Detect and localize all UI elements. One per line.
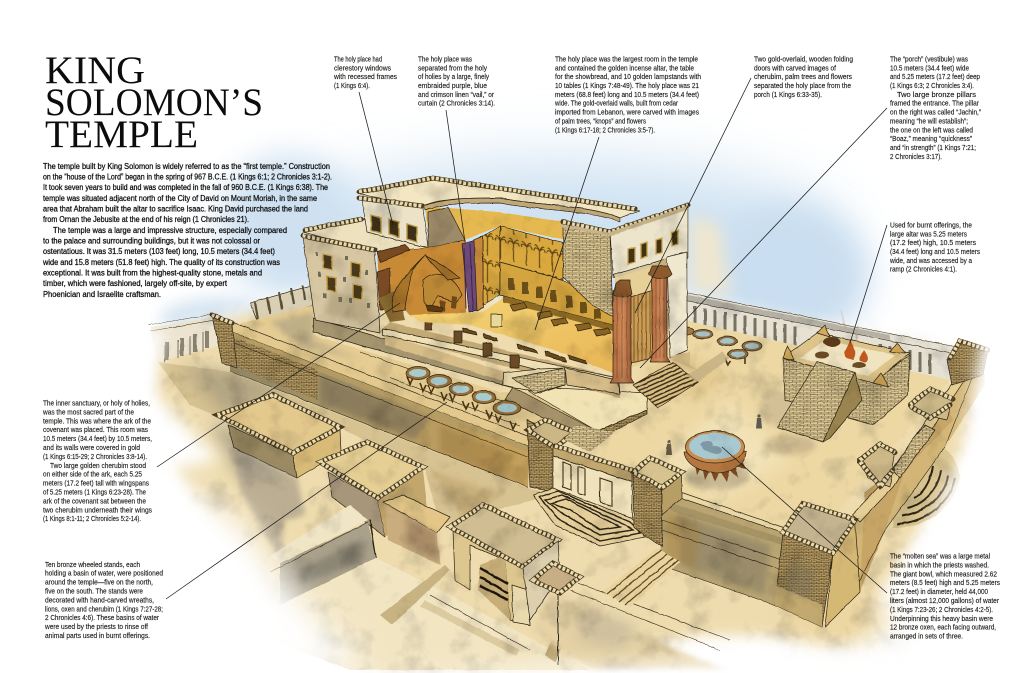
callout: porch and pillars: on the right was called “Jachin,” [890, 109, 982, 117]
callout: holy place: for the showbread, and 10 golden lampstands with [555, 73, 701, 81]
callout: altar [889, 222, 980, 274]
callout: bronze stands: holding a basin of water, were positioned [45, 570, 163, 578]
intro text: temple was situated adjacent north of the City of David on Mount Moriah, in the same [43, 194, 317, 203]
callout: folding doors: separated the holy place from the [754, 82, 851, 90]
callout: inner sanctuary: of 5.25 meters (1 Kings 6:23-28). The [43, 488, 146, 496]
altar top [783, 333, 910, 383]
clerestory wall [362, 200, 428, 248]
callout: molten sea [890, 552, 1000, 641]
callout: molten sea: 12 bronze oxen, each facing outward, [890, 624, 996, 632]
callout: vail curtain: separated from the holy [418, 64, 487, 72]
lower carved band [500, 262, 613, 325]
bronze wheeled basin stands [406, 366, 521, 429]
callout: porch and pillars: Two large bronze pillars [897, 91, 976, 99]
callout: folding doors [754, 56, 853, 99]
callout: inner sanctuary: (1 Kings 8:1-11; 2 Chronicles 5:2-14). [43, 515, 141, 523]
gate upper wall [553, 446, 632, 482]
intro text: exceptional. It was built from the highest-quality stone, metals and [43, 268, 262, 278]
second lower tower and corridor [320, 442, 450, 565]
callout: inner sanctuary: covenant was placed. This room was [43, 426, 148, 434]
callout: bronze stands: decorated with hand-carved wreaths, [45, 596, 154, 604]
callout: altar: large altar was 5.25 meters [890, 230, 967, 238]
temple roof and clerestory [358, 178, 640, 248]
right porch wall [667, 252, 687, 358]
callout: molten sea: Underpinning this heavy basin were [890, 615, 993, 623]
lampstands and tables [510, 303, 611, 336]
callout: vail curtain: curtain (2 Chronicles 3:14). [418, 100, 495, 108]
callout: vail curtain: and crimson linen “vail,” or [418, 91, 495, 99]
callout: molten sea: arranged in sets of three. [890, 633, 963, 641]
callout: vail curtain: of holies by a large, finely [418, 73, 489, 81]
back wall palms [500, 226, 563, 280]
callout: inner sanctuary: meters (17.2 feet) tall with wingspans [43, 480, 149, 488]
callout: holy place: 10 tables (1 Kings 7:48-49). The holy place was 21 [555, 82, 699, 90]
callout: molten sea: (17.2 feet) in diameter, held 44,000 [890, 588, 988, 596]
callout: molten sea: (1 Kings 7:23-26; 2 Chronicles 4:2-5). [890, 606, 993, 614]
long west wall [212, 315, 530, 487]
intro text [42, 162, 332, 299]
ground sand wash [150, 290, 985, 670]
intro text: to the palace and surrounding buildings, but it was not colossal or [43, 236, 260, 246]
cobbled path [565, 425, 615, 452]
lower courtyard ground [158, 362, 552, 525]
south steps [603, 548, 680, 607]
callout: porch and pillars: and 5.25 meters (17.2 feet) deep [890, 73, 980, 81]
front wall with east gate [527, 420, 785, 605]
callout: altar: Used for burnt offerings, the [890, 222, 972, 230]
intro text: It took seven years to build and was completed in the fall of 960 B.C.E. (1 Kings 6:38). The [43, 183, 328, 192]
title: KING [45, 49, 145, 92]
courtyard figures [666, 414, 762, 455]
callout: holy place: (1 Kings 6:17-18; 2 Chronicles 3:5-7). [555, 126, 655, 134]
callout: folding doors: porch (1 Kings 6:33-35). [754, 91, 822, 99]
callout: bronze stands: five on the south. The stands were [45, 588, 143, 596]
holy of holies interior with cherubim [377, 240, 466, 322]
callout: porch and pillars [890, 56, 982, 161]
leader lines [157, 78, 887, 599]
callout: folding doors: cherubim, palm trees and flowers [754, 73, 852, 81]
callout: inner sanctuary: temple. This was where the ark of the [43, 417, 151, 425]
callout: altar: wide, and was accessed by a [889, 257, 972, 265]
back colonnade wall [683, 292, 957, 383]
intro text: wide and 15.8 meters (51.8 feet) high. The quality of its construction was [42, 258, 280, 267]
callout: altar: (17.2 feet) high, 10.5 meters [890, 239, 976, 247]
first lower tower [218, 395, 341, 560]
callout: clerestory windows: with recessed frames [333, 73, 397, 81]
porch back wall [615, 262, 667, 375]
porch side wash stands [680, 327, 762, 365]
left gate tower [527, 420, 553, 492]
callout: holy place: imported from Lebanon, were carved with images [555, 109, 699, 117]
callout: inner sanctuary: Two large golden cherubim stood [50, 462, 146, 470]
title [45, 49, 263, 156]
windows [323, 254, 362, 300]
altar base walls [783, 355, 910, 425]
intro text: The temple built by King Solomon is widely referred to as the “first temple.” Construction [43, 162, 330, 171]
intro text: area that Abraham built the altar to sacrifice Isaac. King David purchased the land [43, 204, 308, 214]
holy place gold walls and floor [410, 226, 613, 373]
cherub left [392, 255, 425, 312]
southeast corner tower [775, 503, 860, 627]
callout: holy place [554, 56, 701, 134]
temple front staircase [633, 362, 698, 408]
callout: inner sanctuary: 10.5 meters (34.4 feet) by 10.5 meters, [43, 435, 152, 443]
callout: vail curtain: embraided purple, blue [418, 82, 487, 90]
altar fire and coal [845, 340, 868, 362]
intro text: ostentatious. It was 31.5 meters (103 feet) long, 10.5 meters (34.4 feet) [43, 247, 275, 256]
callout: molten sea: basin in which the priests washed. [890, 561, 989, 569]
small turret [533, 563, 580, 593]
callout: folding doors: doors with carved images of [754, 64, 836, 72]
callout: inner sanctuary: (1 Kings 6:15-29; 2 Chronicles 3:8-14). [43, 453, 147, 461]
holy of holies exterior block [303, 218, 428, 333]
callout: porch and pillars: “Boaz,” meaning “quickness” [890, 135, 973, 143]
left colonnade [148, 285, 313, 362]
altar of burnt offerings [777, 310, 910, 442]
callout: bronze stands: Ten bronze wheeled stands, each [45, 561, 140, 569]
main courtyard floor [560, 320, 950, 532]
callout: inner sanctuary: ark of the covenant sat between the [43, 497, 146, 505]
callout: porch and pillars: the one on the left was called [890, 126, 973, 134]
callout: bronze stands [44, 561, 163, 640]
callout: altar: (34.4 feet) long and 10.5 meters [890, 248, 980, 256]
callout: bronze stands: 2 Chronicles 4:6). These basins of water [45, 614, 160, 622]
outer gray wall [270, 505, 376, 605]
callout: bronze stands: around the temple—five on the north, [45, 579, 153, 587]
intro text: timber, which were fashioned, largely off-site, by expert [43, 279, 228, 288]
left panel of carved wall [483, 226, 500, 305]
callout: inner sanctuary: on either side of the ark, each 5.25 [43, 471, 142, 479]
callout: vail curtain: The holy place was [418, 56, 472, 64]
white fade overlays [0, 300, 1024, 673]
corridor [383, 495, 450, 533]
callout: molten sea: liters (almost 12,000 gallons) of water [890, 597, 1000, 605]
bronze pillar boaz [610, 290, 634, 383]
callout: holy place: of palm trees, “knops” and flowers [555, 117, 646, 125]
roof slab [358, 179, 640, 218]
callout: clerestory windows: clerestory windows [334, 64, 391, 72]
callout: inner sanctuary: and its walls were covered in gold [43, 444, 140, 452]
title: TEMPLE [45, 113, 198, 156]
callout: holy place: and contained the golden incense altar, the table [555, 64, 694, 72]
porch with bronze pillars [610, 252, 687, 383]
folding door beside curtain [474, 236, 483, 311]
callout: inner sanctuary: was the most sacred part of the [42, 408, 134, 416]
callout: folding doors: Two gold-overlaid, wooden folding [754, 56, 853, 64]
callout: molten sea: meters (8.5 feet) high and 5.25 meters [890, 579, 1000, 587]
temple side chambers and base [313, 318, 620, 398]
callout: porch and pillars: (1 Kings 6:3; 2 Chronicles 3:4). [890, 82, 974, 90]
south brick wall and tower [560, 205, 688, 317]
gate steps [533, 488, 645, 546]
bronze pillar jachin [650, 275, 670, 362]
callout: porch and pillars: framed the entrance. The pillar [890, 100, 980, 108]
title: SOLOMON’S [45, 81, 263, 124]
callout: clerestory windows: The holy place had [334, 56, 382, 64]
callout: porch and pillars: meaning “he will establish”; [890, 117, 968, 125]
callout: porch and pillars: 10.5 meters (34.4 feet) wide [890, 64, 969, 72]
sky wash [160, 155, 870, 345]
callout: holy place: meters (68.8 feet) long and 10.5 meters (34.4 feet) [555, 91, 699, 99]
callout: molten sea: The “molten sea” was a large metal [890, 552, 990, 560]
intro text: from Ornan the Jebusite at the end of his reign (1 Chronicles 21). [43, 215, 249, 224]
callout: bronze stands: lions, oxen and cherubim (1 Kings 7:27-28; [45, 605, 163, 613]
callout: inner sanctuary: The inner sanctuary, or holy of holies, [43, 400, 150, 408]
callout: holy place: The holy place was the largest room in the temple [555, 56, 698, 64]
front wall right section [660, 488, 785, 605]
callout: bronze stands: animal parts used in burnt offerings. [45, 632, 150, 640]
folding doors [630, 290, 654, 363]
molten sea [684, 431, 749, 489]
callout: clerestory windows: (1 Kings 6:4). [334, 82, 370, 90]
cherub right [423, 274, 462, 310]
callout: inner sanctuary: two cherubim underneath their wings [43, 506, 152, 514]
callout: inner sanctuary [42, 400, 152, 523]
callout: bronze stands: were used by the priests to rinse off [44, 623, 148, 631]
east wall and towers [825, 340, 988, 627]
porch side terrace [670, 352, 730, 382]
callout: clerestory windows [333, 56, 397, 90]
curtain [462, 240, 478, 312]
temple artwork [148, 178, 988, 670]
intro text: on the “house of the Lord” began in the spring of 967 B.C.E. (1 Kings 6:1; 2 Chronicles 3:1-2). [43, 172, 332, 182]
right gate tower [633, 473, 662, 547]
callout: porch and pillars: 2 Chronicles 3:17). [890, 153, 942, 161]
inner courtyard terrace [232, 305, 647, 441]
east stairway [893, 449, 960, 528]
callout: molten sea: The giant bowl, which measured 2.62 [890, 570, 997, 578]
callout: porch and pillars: and “in strength” (1 Kings 7:21; [890, 144, 976, 152]
floor [410, 298, 613, 373]
lower outer court [270, 558, 730, 670]
altar ramp [777, 362, 855, 442]
callout: holy place: wide. The gold-overlaid walls, built from cedar [554, 100, 679, 108]
southern gate tower [450, 505, 580, 665]
ark [426, 305, 443, 312]
intro text: The temple was a large and impressive structure, especially compared [53, 226, 287, 235]
callout: vail curtain [418, 56, 495, 108]
intro text: Phoenician and Israelite craftsman. [43, 290, 161, 299]
gate door [553, 456, 632, 518]
interior upper gold wall [425, 206, 565, 240]
callout: altar: ramp (2 Chronicles 4:1). [890, 266, 957, 274]
callout: porch and pillars: The “porch” (vestibule) was [890, 56, 968, 64]
